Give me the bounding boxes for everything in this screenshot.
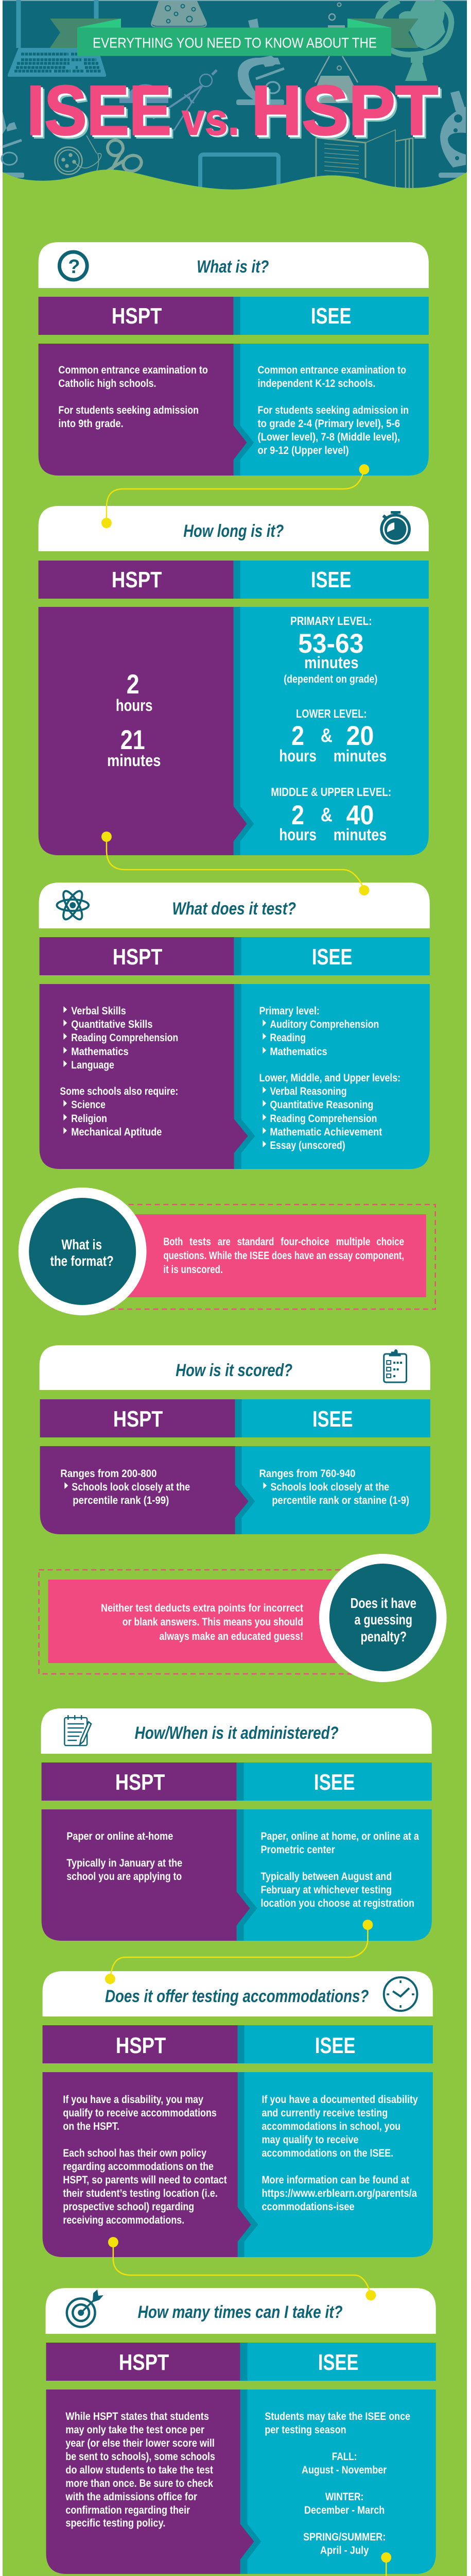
body columns [42,1809,432,1941]
body columns [40,1446,430,1534]
text: ISEE retake policy: April - July [320,2544,369,2556]
callout: what is the format [19,1188,435,1315]
text: ISEE administration: Typically between August and [260,1870,392,1883]
text: ISEE score range [259,1467,409,1506]
text: HSPT topics: Quantitative Skills [71,1018,153,1030]
bullets [64,1482,267,1489]
text: ISEE middle and upper level: 2 [291,800,304,831]
circle badge: What is [61,1236,102,1252]
text: ISEE primary level [284,614,377,685]
text: ISEE topics: Essay (unscored) [270,1139,345,1151]
heading text: How long is it? [183,521,284,541]
section: how many times [46,2288,436,2574]
text: ISEE topics: Reading Comprehension [270,1112,377,1125]
text: HSPT topics: Religion [71,1112,107,1125]
text: ISEE administration [260,1830,420,1909]
icon: clipboard checklist [384,1350,407,1382]
text: HSPT score range [60,1467,190,1506]
section: how is it scored [40,1345,430,1534]
callout text [163,1235,404,1276]
callout text: or blank answers. This means you should [123,1616,303,1628]
column headers: ISEE [314,1770,355,1795]
text: HSPT topics: Verbal Skills [71,1005,126,1017]
column headers: HSPT [113,944,163,970]
title word: vs.: vs. [184,96,241,146]
title word: vs.: vs. [183,96,240,145]
callout text: standard [237,1235,274,1248]
column headers [46,2343,436,2381]
text: ISEE score range: Schools look closely at the [270,1481,389,1493]
icon: protractor [119,88,168,103]
connector: accommodations to how many times [108,2237,376,2300]
body columns [39,607,429,855]
icon: tablet [200,155,278,201]
text: ISEE middle and upper level [271,785,391,844]
text: ISEE middle and upper level: 40 [346,800,374,831]
text: HSPT retake policy [65,2410,215,2529]
callout text: always make an educated guess! [159,1630,303,1642]
column headers: HSPT [115,1770,165,1795]
text: HSPT topics [60,1005,178,1138]
text: ISEE administration: February at whichever testing [260,1884,392,1896]
icon: stopwatch [380,511,411,545]
text: HSPT accommodations: Each school has their own policy [63,2147,206,2159]
top banner ribbon [50,19,418,56]
column headers: ISEE [311,303,352,329]
text: HSPT topics: Science [71,1098,106,1111]
text: ISEE middle and upper level: hours [279,825,317,844]
text: ISEE topics: Quantitative Reasoning [270,1098,373,1111]
text: HSPT accommodations: regarding accommodations on the [63,2160,214,2173]
text: HSPT duration: 21 [120,725,145,755]
heading panel [39,506,429,551]
text: ISEE lower level: 20 [346,721,374,751]
icon: microscope centre [236,19,284,105]
text: HSPT score range: Schools look closely at the [72,1481,190,1493]
text: HSPT accommodations: receiving accommodations. [63,2214,184,2226]
text: ISEE middle and upper level: & [321,804,333,826]
body columns [43,2072,433,2257]
callout text: questions. While the ISEE does have an essay component, [163,1249,404,1262]
text: HSPT duration [107,669,161,770]
text: ISEE administration: Paper, online at home, or online at a [260,1830,420,1842]
circle badge [319,1554,447,1682]
text: HSPT accommodations: prospective school) regarding [63,2200,194,2213]
heading text: How many times can I take it? [138,2302,343,2322]
icon: target with dart [67,2290,103,2327]
text: ISEE accommodations: If you have a documented disability [261,2093,418,2106]
text: ISEE administration: location you choose at registration [260,1897,414,1909]
column headers [40,937,430,975]
text: ISEE accommodations: https://www.erblearn.org/parents/a [261,2187,417,2199]
text: ISEE retake policy [265,2410,410,2556]
text: ISEE lower level: & [321,725,333,747]
text: HSPT retake policy: While HSPT states that students [65,2410,209,2422]
text: HSPT retake policy: may only take the test once per [65,2424,205,2436]
heading text: How is it scored? [176,1361,292,1380]
heading panel [41,1708,432,1754]
title word: ISEE: ISEE [29,73,173,151]
icon: bubbles and flask neck [328,3,345,28]
text: HSPT retake policy: year (or else their lower score will [65,2437,215,2449]
text: ISEE topics [259,1005,400,1151]
main title [27,71,442,152]
icon: scissors [104,138,144,174]
heading text: How/When is it administered? [135,1723,339,1743]
heading panel [40,1345,430,1390]
heading text: What is it? [197,257,269,277]
text: ISEE description: independent K-12 schools. [257,377,375,389]
text: HSPT accommodations: qualify to receive accommodations [63,2107,217,2119]
text: HSPT retake policy: confirmation regarding their [65,2504,190,2516]
text: ISEE retake policy: WINTER: [325,2490,363,2503]
circle badge: the format? [50,1253,114,1269]
circle badge: Does it have [351,1595,416,1611]
text: HSPT score range: percentile rank (1-99) [73,1494,169,1506]
section: what is it [39,242,429,476]
heading text: Does it offer testing accommodations? [105,1987,369,2006]
column headers [42,1762,432,1801]
text: ISEE lower level [279,707,387,765]
text: ISEE lower level: LOWER LEVEL: [296,707,367,720]
heading panel [46,2288,436,2334]
text: HSPT duration: minutes [107,751,161,770]
title word: HSPT: HSPT [253,73,440,151]
heading panel [43,1971,433,2016]
section: how long is it [39,506,429,855]
text: HSPT retake policy: be sent to schools), some schools [65,2450,215,2463]
column headers: ISEE [312,1406,353,1432]
icon: microscope right [439,91,466,178]
icon: globe [378,0,451,81]
text: ISEE score range: percentile rank or stanine (1-9) [272,1494,409,1506]
icon: microscope left [2,112,24,178]
text: ISEE topics: Mathematic Achievement [270,1126,382,1138]
body columns [39,344,429,476]
text: ISEE description: or 9-12 (Upper level) [257,444,349,456]
title word: HSPT: HSPT [255,74,442,152]
section: what does it test [39,883,430,1169]
text: ISEE retake policy: Students may take the ISEE once [265,2410,410,2422]
column headers [40,1399,430,1437]
icon: notepad [64,1715,91,1745]
text: ISEE lower level: hours [279,747,317,765]
text: ISEE description: Common entrance examination to [257,364,406,376]
text: HSPT description [58,364,208,430]
column headers: HSPT [112,567,162,592]
icon: button and thread [55,135,101,174]
text: ISEE topics: Lower, Middle, and Upper levels: [259,1072,400,1084]
callout: guessing penalty [39,1554,447,1682]
icon: question mark [59,252,87,280]
text: ISEE primary level: (dependent on grade) [284,673,377,685]
column headers: HSPT [116,2033,166,2058]
text: ISEE primary level: 53-63 [298,629,363,659]
column headers [39,561,429,599]
callout text: Both [163,1235,183,1248]
heading panel [39,242,429,288]
connector: administered to accommodations [105,1920,373,1984]
text: ISEE primary level: PRIMARY LEVEL: [290,614,372,628]
text: ISEE topics: Verbal Reasoning [270,1085,347,1097]
text: ISEE administration: Prometric center [260,1843,335,1856]
text: ISEE retake policy: SPRING/SUMMER: [303,2531,386,2543]
text: ISEE accommodations [261,2093,418,2213]
column headers: ISEE [318,2350,358,2375]
text: ISEE topics: Mathematics [270,1045,327,1058]
column headers: HSPT [112,303,162,329]
text: HSPT topics: Language [71,1059,114,1071]
text: ISEE topics: Auditory Comprehension [270,1018,379,1030]
text: ISEE accommodations: may qualify to receive [261,2133,359,2146]
text: ISEE score range: Ranges from 760-940 [259,1467,356,1480]
text: HSPT retake policy: specific testing policy. [65,2517,165,2529]
text: HSPT accommodations: on the HSPT. [63,2120,119,2132]
title word: vs.: vs. [182,95,239,144]
column headers: ISEE [311,567,352,592]
icon: flask lower [311,56,361,103]
text: HSPT administration: Typically in January at the [66,1857,182,1869]
text: ISEE accommodations: and currently receive testing [261,2107,388,2119]
text: HSPT topics: Reading Comprehension [71,1031,178,1044]
text: HSPT duration: hours [116,696,153,715]
text: HSPT administration [66,1830,182,1883]
text: ISEE accommodations: ccommodations-isee [261,2200,355,2213]
connector: how long to what does it test [101,832,369,895]
bullets [63,1006,266,1147]
text: HSPT administration: school you are applying to [66,1870,182,1883]
text: HSPT description: Catholic high schools. [58,377,156,389]
text: ISEE middle and upper level: MIDDLE & UPPER LEVEL: [271,785,391,799]
body columns [40,984,430,1169]
column headers [39,297,429,335]
circle badge: penalty? [360,1629,407,1645]
text: ISEE accommodations: accommodations on the ISEE. [261,2147,393,2159]
text: HSPT accommodations [63,2093,227,2226]
icon: clock [384,1977,417,2011]
callout text [101,1602,303,1642]
circle badge: a guessing [355,1612,412,1628]
text: HSPT accommodations: their student’s testing location (i.e. [63,2187,218,2199]
heading text: What does it test? [172,899,296,919]
text: HSPT retake policy: more than once. Be sure to check [65,2477,213,2489]
connector: how many times to when [124,2552,391,2576]
section: testing accommodations [43,1971,433,2257]
text: ISEE accommodations: More information can be found at [261,2174,409,2186]
text: HSPT topics: Some schools also require: [60,1085,178,1097]
callout text: tests [189,1235,211,1248]
icon: drafting compass [153,70,217,130]
text: HSPT retake policy: with the admissions office for [65,2490,198,2503]
connector: what is it to how long [101,464,369,528]
icon: atom [57,889,89,922]
text: ISEE lower level: minutes [334,747,387,765]
text: ISEE description [257,364,409,456]
text: HSPT description: Common entrance examination to [58,364,208,376]
heading panel [39,883,430,928]
text: ISEE topics: Reading [270,1031,306,1044]
icon: flask top [151,1,207,27]
callout text: choice [376,1235,404,1248]
column headers [43,2025,433,2063]
callout text: it is unscored. [163,1263,223,1276]
text: ISEE accommodations: accommodations in school, you [261,2120,400,2132]
text: ISEE topics: Primary level: [259,1005,320,1017]
text: HSPT score range: Ranges from 200-800 [60,1467,157,1480]
section: how and when administered [41,1708,432,1941]
title word: ISEE: ISEE [27,71,171,149]
callout text: Neither test deducts extra points for incorrect [101,1602,303,1614]
icon: question mark: ? [68,256,80,278]
banner text: EVERYTHING YOU NEED TO KNOW ABOUT THE [93,35,377,51]
circle badge [19,1188,147,1315]
text: ISEE lower level: 2 [291,721,304,751]
header background [2,0,467,206]
column headers: HSPT [113,1406,163,1432]
text: ISEE retake policy: per testing season [265,2424,346,2436]
title word: ISEE: ISEE [30,74,175,152]
text: HSPT accommodations: HSPT, so parents will need to contact [63,2174,227,2186]
text: ISEE retake policy: FALL: [332,2450,357,2463]
callout text: are [218,1235,231,1248]
callout text: four-choice [281,1235,329,1248]
text: ISEE primary level: minutes [304,653,359,672]
text: HSPT topics: Mathematics [71,1045,129,1058]
text: ISEE description: (Lower level), 7-8 (Middle level), [257,431,400,443]
text: HSPT description: into 9th grade. [58,417,124,430]
text: ISEE description: For students seeking admission in [257,404,409,416]
text: ISEE retake policy: December - March [304,2504,385,2516]
text: HSPT accommodations: If you have a disability, you may [63,2093,203,2106]
text: ISEE middle and upper level: minutes [334,825,387,844]
body columns [46,2389,436,2574]
text: HSPT description: For students seeking admission [58,404,199,416]
column headers: HSPT [119,2350,169,2375]
icon: laptop [8,0,106,77]
text: HSPT administration: Paper or online at-home [66,1830,173,1842]
callout text: multiple [336,1235,370,1248]
title word: HSPT: HSPT [251,71,438,149]
text: ISEE retake policy: August - November [302,2464,387,2476]
text: HSPT retake policy: do allow students to take the test [65,2464,213,2476]
column headers: ISEE [315,2033,356,2058]
icon: book [316,130,413,189]
text: HSPT duration: 2 [127,669,139,700]
column headers: ISEE [312,944,353,970]
text: HSPT topics: Mechanical Aptitude [71,1126,162,1138]
text: ISEE description: to grade 2-4 (Primary level), 5-6 [257,417,400,430]
